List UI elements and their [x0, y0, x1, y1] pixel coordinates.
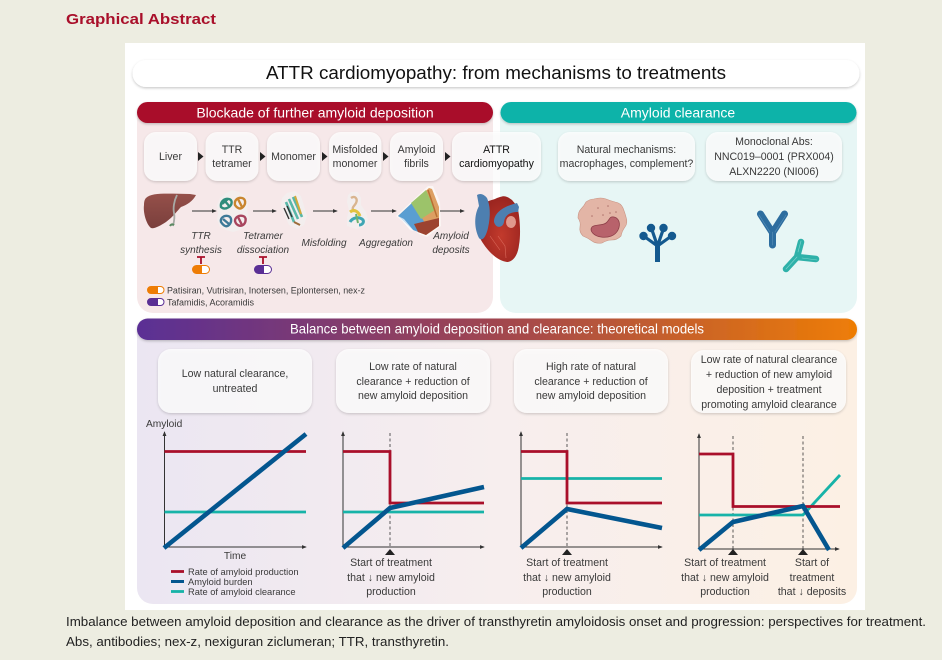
- panel: balance between deposition and clearance: [137, 318, 857, 604]
- box: monoclonal antibodies: [706, 132, 842, 181]
- scenario box 2: clearance + reduction of: [356, 376, 470, 388]
- scenario box 4: promoting amyloid clearance: [701, 399, 837, 411]
- panel: amyloid clearance: [500, 102, 857, 313]
- scenario box 1: Low natural clearance,: [182, 368, 288, 380]
- label: TTR synthesis: synthesis: [180, 245, 222, 256]
- scenario box 4: + reduction of new amyloid: [706, 369, 832, 381]
- pathway box: TTR tetramer: tetramer: [212, 158, 252, 170]
- chart 4: combined with clearance-promoting treatment: that ↓ deposits: [778, 586, 846, 598]
- scenario box 3: new amyloid deposition: [536, 390, 646, 402]
- label: amyloid deposits: [432, 231, 470, 256]
- scenario box 3: [514, 349, 668, 413]
- chart 1: untreated: Time: [224, 551, 246, 562]
- scenario box 3: High rate of natural: [546, 361, 636, 373]
- chart legend: [171, 567, 299, 597]
- scenario box 4: deposition + treatment: [716, 384, 822, 396]
- chart 2: reduction of deposition, low clearance: [343, 432, 484, 598]
- icon: monoclonal antibody blue: [759, 214, 786, 245]
- inhibitor: purple pill: [254, 257, 272, 274]
- icon: liver: [144, 194, 196, 228]
- icon: heart: [475, 194, 520, 262]
- pathway box: amyloid fibrils: [390, 132, 443, 181]
- panel: blockade of further amyloid deposition: [137, 102, 541, 313]
- pathway box: misfolded monomer: monomer: [333, 158, 378, 170]
- heading: Graphical Abstract: Graphical Abstract: [66, 11, 216, 28]
- header: blockade: Blockade of further amyloid deposition: [196, 104, 434, 120]
- pathway box: TTR tetramer: [206, 132, 258, 181]
- label: amyloid deposits: Amyloid: [432, 231, 469, 242]
- chart 4: combined with clearance-promoting treatment: [681, 434, 846, 598]
- header: balance: [137, 318, 857, 340]
- box: monoclonal antibodies: ALXN2220 (NI006): [729, 166, 819, 178]
- chart 2: reduction of deposition, low clearance: that ↓ new amyloid: [347, 572, 435, 584]
- scenario box 2: [336, 349, 490, 413]
- scenario box 1: untreated: [213, 383, 257, 395]
- scenario box 1: [158, 349, 312, 413]
- caption: [66, 614, 926, 649]
- scenario box 2: new amyloid deposition: [358, 390, 468, 402]
- header: amyloid clearance: Amyloid clearance: [621, 104, 735, 120]
- caption: Imbalance between amyloid deposition and clearance as the driver of transthyretin amyloidosis onset and progression: perspectives for treatment.: [66, 614, 926, 629]
- chart 4: combined with clearance-promoting treatment: treatment: [790, 572, 834, 584]
- icon: misfolded monomer protein: [347, 192, 368, 229]
- scenario box 2: Low rate of natural: [369, 361, 457, 373]
- box: monoclonal antibodies: Monoclonal Abs:: [735, 136, 813, 148]
- chart 4: combined with clearance-promoting treatment: Start of: [795, 557, 829, 569]
- label: tetramer dissociation: [237, 231, 290, 256]
- icon: monoclonal antibody teal: [786, 241, 817, 269]
- icon: macrophage: [578, 198, 627, 243]
- pathway box: monomer: Monomer: [271, 151, 316, 163]
- chart 3: reduction of deposition, high clearance: [521, 432, 662, 598]
- box: natural mechanisms: Natural mechanisms:: [577, 144, 676, 156]
- legend: orange drugs: Patisiran, Vutrisiran, Inotersen, Eplontersen, nex-z: [167, 286, 365, 296]
- pathway arrowheads: [198, 152, 450, 161]
- box: natural mechanisms: macrophages, complement?: [560, 158, 693, 170]
- pathway box: amyloid fibrils: Amyloid: [398, 144, 435, 156]
- title bar: [132, 60, 860, 87]
- icon: complement protein: [639, 224, 676, 262]
- pathway box: misfolded monomer: [329, 132, 382, 181]
- header: blockade: [137, 102, 493, 123]
- scenario box 3: clearance + reduction of: [534, 376, 648, 388]
- header: balance: Balance between amyloid deposition and clearance: theoretical models: [290, 320, 704, 336]
- pathway box: ATTR cardiomyopathy: cardiomyopathy: [459, 158, 535, 170]
- chart 1: untreated: Amyloid: [146, 419, 183, 430]
- process arrows: [192, 210, 464, 212]
- box: monoclonal antibodies: NNC019–0001 (PRX004): [714, 151, 834, 163]
- label: misfolding: Misfolding: [301, 238, 347, 249]
- pathway box: ATTR cardiomyopathy: [452, 132, 541, 181]
- pathway box: TTR tetramer: TTR: [222, 144, 243, 156]
- chart legend: Rate of amyloid clearance: [188, 587, 296, 597]
- chart 4: combined with clearance-promoting treatment: production: [700, 586, 750, 598]
- icon: TTR tetramer protein: [217, 190, 249, 232]
- pathway box: liver: [144, 132, 197, 181]
- chart 4: combined with clearance-promoting treatment: Start of treatment: [684, 557, 766, 569]
- label: TTR synthesis: TTR: [191, 231, 211, 242]
- chart 2: reduction of deposition, low clearance: Start of treatment: [350, 557, 432, 569]
- pathway box: amyloid fibrils: fibrils: [404, 158, 429, 170]
- caption: Abs, antibodies; nex-z, nexiguran ziclumeran; TTR, transthyretin.: [66, 634, 449, 649]
- pathway box: ATTR cardiomyopathy: ATTR: [483, 144, 510, 156]
- label: tetramer dissociation: Tetramer: [243, 231, 283, 242]
- chart 3: reduction of deposition, high clearance: Start of treatment: [526, 557, 608, 569]
- title bar: ATTR cardiomyopathy: from mechanisms to treatments: [266, 63, 726, 83]
- chart 3: reduction of deposition, high clearance: that ↓ new amyloid: [523, 572, 611, 584]
- white figure area: [125, 43, 865, 610]
- chart legend: Amyloid burden: [188, 577, 253, 587]
- label: TTR synthesis: [180, 231, 222, 256]
- icon: monomer protein: [281, 191, 307, 229]
- pathway box: misfolded monomer: Misfolded: [332, 144, 378, 156]
- pathway box: liver: Liver: [159, 151, 182, 163]
- legend: purple drugs: Tafamidis, Acoramidis: [167, 298, 254, 308]
- label: tetramer dissociation: dissociation: [237, 245, 290, 256]
- icon: amyloid fibril: [396, 186, 441, 237]
- scenario box 4: [691, 350, 846, 413]
- header: amyloid clearance: [500, 102, 856, 123]
- chart 3: reduction of deposition, high clearance: production: [542, 586, 592, 598]
- chart legend: Rate of amyloid production: [188, 567, 299, 577]
- label: aggregation: Aggregation: [358, 238, 413, 249]
- chart 4: combined with clearance-promoting treatment: that ↓ new amyloid: [681, 572, 769, 584]
- chart 2: reduction of deposition, low clearance: production: [366, 586, 416, 598]
- pathway box: monomer: [267, 132, 320, 181]
- inhibitor: orange pill: [192, 257, 210, 274]
- scenario box 4: Low rate of natural clearance: [701, 354, 837, 366]
- box: natural mechanisms: [558, 132, 695, 181]
- label: amyloid deposits: deposits: [432, 245, 470, 256]
- chart 1: untreated: [146, 419, 306, 597]
